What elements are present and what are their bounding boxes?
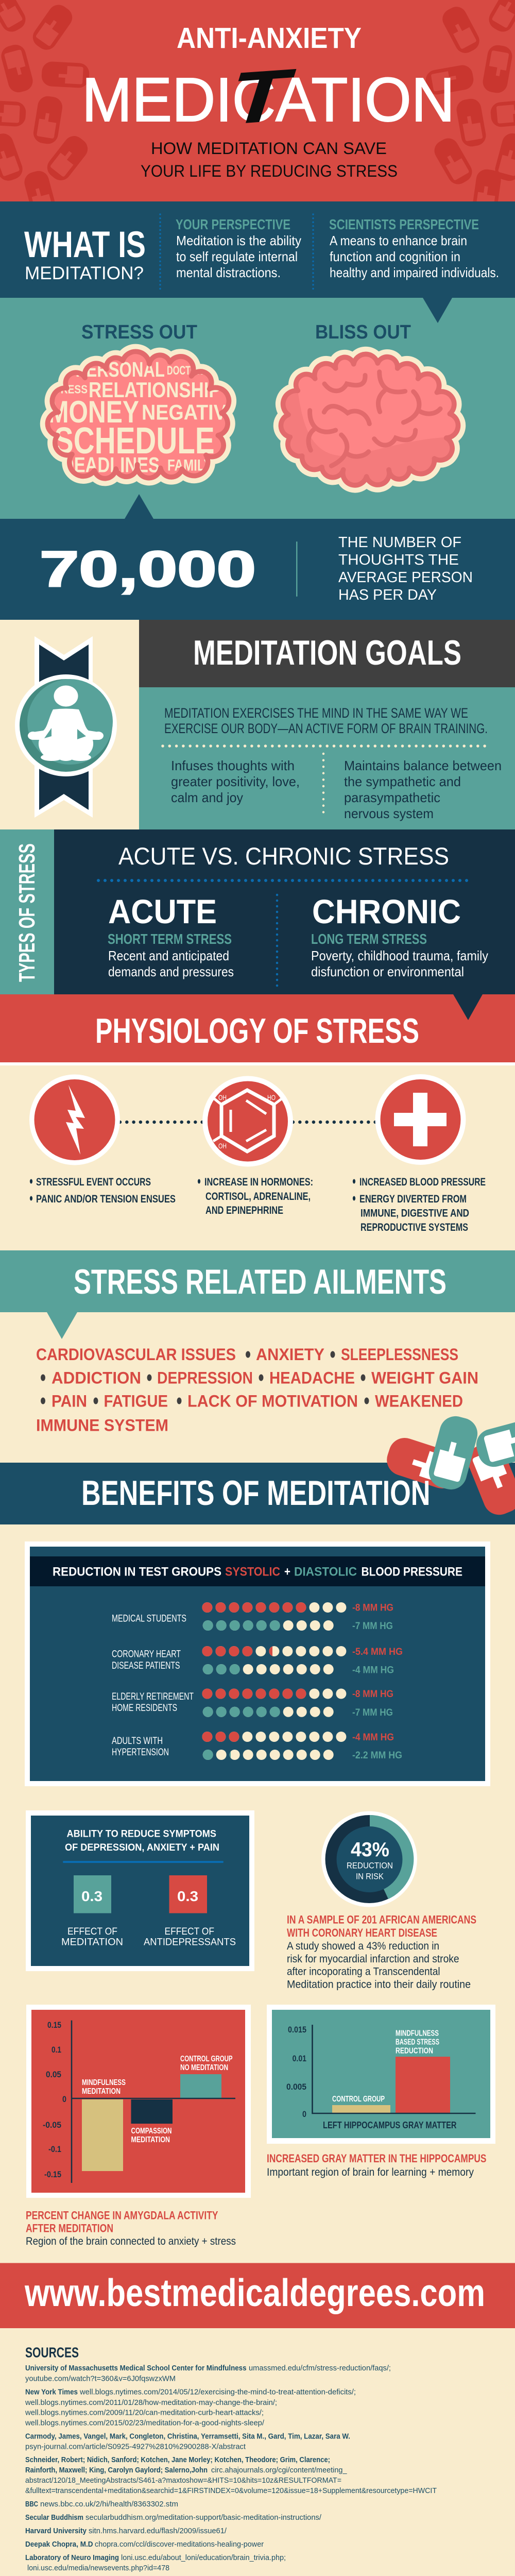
icon: stressed brain word cloud: FAMILY — [167, 455, 212, 474]
source: schneider: abstract/120/18_MeetingAbstracts/S461-a?maxtoshow=&HITS=10&hits=10z&RESULTFORMAT= — [25, 2477, 341, 2485]
panel: benefits of meditation header — [0, 1413, 515, 1524]
call to action: website banner — [0, 2263, 515, 2328]
source: chopra: Deepak Chopra, M.D — [25, 2540, 93, 2549]
donut chart: 43 percent reduction: IN RISK — [356, 1871, 384, 1882]
list: blood pressure: REPRODUCTIVE SYSTEMS — [360, 1221, 468, 1233]
list: ailments: IMMUNE SYSTEM — [36, 1416, 168, 1434]
source: neuro imaging: Laboratory of Neuro Imaging — [25, 2554, 119, 2562]
y axis labels: -0.15 — [44, 2170, 61, 2179]
heading: acute vs chronic: ACUTE VS. CHRONIC STRESS — [118, 842, 449, 870]
box: meditation effect: MEDITATION — [61, 1936, 123, 1947]
source: bbc: BBC — [25, 2500, 38, 2509]
panel title: ABILITY TO REDUCE SYMPTOMS — [67, 1828, 216, 1839]
box: antidepressant effect: 0.3 — [177, 1888, 198, 1904]
icon: ribbon with meditating figure — [15, 636, 117, 818]
list: ailments: WEAKENED — [375, 1392, 463, 1411]
chronic column: disfunction or environmental — [311, 964, 464, 979]
goal: nervous system balance: nervous system — [344, 806, 434, 821]
source: carmody — [25, 2433, 350, 2451]
y axis labels: 0 — [62, 2094, 66, 2104]
y axis labels: 0.015 — [288, 2025, 306, 2035]
chart title: DIASTOLIC — [294, 1565, 357, 1579]
subtitle — [141, 139, 398, 180]
bar labels: MEDITATION — [131, 2136, 170, 2144]
arrow: pointer up — [125, 494, 153, 519]
row: elderly retirement home residents: HOME RESIDENTS — [112, 1702, 177, 1714]
donut chart: 43 percent reduction — [321, 1811, 417, 1907]
source: umass — [25, 2364, 391, 2383]
icon: stressed brain word cloud: DEADLINES — [62, 453, 160, 477]
your perspective: mental distractions. — [176, 265, 281, 280]
heading: stress out: STRESS OUT — [81, 321, 197, 343]
text block: african american study: Meditation practice into their daily routine — [287, 1979, 471, 1991]
text block: amygdala: AFTER MEDITATION — [26, 2222, 113, 2235]
y axis labels: 0.15 — [47, 2020, 61, 2030]
row: coronary heart disease patients — [112, 1647, 403, 1675]
list: ailments: CARDIOVASCULAR ISSUES — [36, 1345, 236, 1364]
icon: colourful pills — [387, 1416, 515, 1515]
subtitle: HOW MEDITATION CAN SAVE — [151, 139, 387, 158]
panel: stress related ailments header — [0, 1250, 515, 1339]
list: ailments: LACK OF MOTIVATION — [187, 1392, 358, 1411]
donut chart: 43 percent reduction: 43% — [351, 1839, 389, 1861]
source: umass: youtube.com/watch?t=360&v=6J0fqswzxWM — [25, 2375, 176, 2383]
source: schneider: Rainforth, Maxwell; King, Carolyn Gaylord; Salerno,John — [25, 2466, 208, 2475]
y axis labels — [43, 2020, 66, 2179]
row: medical students: MEDICAL STUDENTS — [112, 1613, 186, 1624]
acute column: Recent and anticipated — [108, 948, 229, 963]
chart title: REDUCTION IN TEST GROUPS — [53, 1565, 221, 1579]
y axis labels: 0.005 — [286, 2082, 306, 2092]
source: neuro imaging — [25, 2554, 286, 2572]
panel title: OF DEPRESSION, ANXIETY + PAIN — [65, 1842, 219, 1853]
row: coronary heart disease patients: -4 MM HG — [352, 1665, 394, 1675]
text block: african american study: WITH CORONARY HEART DISEASE — [287, 1926, 437, 1939]
your perspective: Meditation is the ability — [176, 233, 301, 248]
y axis labels: 0.05 — [46, 2070, 61, 2079]
background pill pattern — [0, 0, 515, 221]
row: elderly retirement home residents — [112, 1689, 393, 1718]
source: schneider — [25, 2456, 437, 2495]
list: ailments: ANXIETY — [256, 1345, 324, 1364]
your perspective: YOUR PERSPECTIVE — [176, 216, 290, 232]
heading: bliss out: BLISS OUT — [315, 321, 411, 343]
number caption: AVERAGE PERSON — [338, 569, 473, 586]
text block: gray matter — [267, 2152, 486, 2178]
icon: lightning bolt — [29, 1075, 120, 1165]
goal: positivity: Infuses thoughts with — [171, 758, 295, 773]
source: nyt: well.blogs.nytimes.com/2014/05/12/exercising-the-mind-to-treat-attention-deficits/; — [79, 2388, 356, 2397]
row: coronary heart disease patients: CORONARY HEART — [112, 1649, 181, 1660]
number caption — [338, 534, 473, 603]
bar labels: BASED STRESS — [396, 2038, 439, 2046]
number caption: HAS PER DAY — [338, 587, 437, 603]
row: elderly retirement home residents: -8 MM HG — [352, 1689, 393, 1700]
heading: sources: SOURCES — [25, 2344, 79, 2361]
text block: gray matter: Important region of brain for learning + memory — [267, 2166, 474, 2178]
source: umass: University of Massachusetts Medical School Center for Mindfulness — [25, 2364, 246, 2372]
panel: physiology steps — [29, 1074, 486, 1233]
y axis labels — [286, 2025, 306, 2119]
text block: amygdala: Region of the brain connected to anxiety + stress — [26, 2235, 236, 2247]
panel: stress out vs bliss out — [0, 298, 515, 519]
scientists perspective: SCIENTISTS PERSPECTIVE — [329, 216, 479, 232]
vertical label: types of stress: TYPES OF STRESS — [14, 843, 40, 982]
text block: amygdala — [26, 2209, 236, 2247]
source: chopra: chopra.com/ccl/discover-meditations-healing-power — [95, 2540, 264, 2549]
source: bbc: news.bbc.co.uk/2/hi/health/8363302.stm — [40, 2500, 178, 2509]
hand-drawn letter T: T — [228, 54, 298, 140]
row: adults with hypertension: HYPERTENSION — [112, 1747, 169, 1758]
source: carmody: psyn-journal.com/article/S0925-4927%2810%2900288-X/abstract — [25, 2443, 246, 2451]
bar labels: NO MEDITATION — [180, 2063, 228, 2072]
scientists perspective: function and cognition in — [330, 249, 460, 264]
panel: hippocampus bar chart — [267, 2005, 495, 2144]
text block: african american study: risk for myocardial infarction and stroke — [287, 1953, 459, 1965]
row: adults with hypertension: -4 MM HG — [352, 1732, 394, 1743]
scientists perspective — [329, 216, 499, 280]
box: antidepressant effect — [144, 1875, 236, 1947]
goal: positivity — [171, 758, 300, 805]
hero header panel — [0, 0, 515, 221]
source: carmody: Carmody, James, Vangel, Mark, Congleton, Christina, Yerramsetti, Sita M., Gard, Tim, Lazar, Sara W. — [25, 2433, 350, 2441]
chronic column — [311, 892, 488, 979]
box: meditation effect: 0.3 — [81, 1888, 102, 1904]
panel: meditation goals — [0, 620, 515, 829]
panel title — [65, 1828, 219, 1853]
icon: stressed brain word cloud: PERSONAL — [76, 358, 165, 381]
goal: nervous system balance: the sympathetic and — [344, 774, 461, 789]
row: coronary heart disease patients: DISEASE PATIENTS — [112, 1660, 180, 1671]
arrow: pointer down — [453, 994, 483, 1020]
panel: types of stress — [0, 829, 515, 994]
list: ailments: ADDICTION — [52, 1368, 141, 1387]
box: antidepressant effect: EFFECT OF — [165, 1926, 214, 1937]
text block: african american study — [287, 1913, 476, 1991]
title: anti-anxiety: ANTI-ANXIETY — [177, 22, 362, 55]
bars — [82, 2074, 221, 2171]
bar labels: MEDITATION — [82, 2087, 121, 2096]
source: harvard — [25, 2527, 227, 2535]
icon: stressed brain word cloud: DOCTOR — [167, 364, 203, 378]
text block: african american study: after incoporating a Transcendental — [287, 1966, 440, 1978]
goal: positivity: calm and joy — [171, 790, 243, 805]
source: secular buddhism: secularbuddhism.org/meditation-support/basic-meditation-instructions/ — [85, 2514, 322, 2522]
icon: hormone molecule: OH — [218, 1142, 227, 1150]
list: ailments: PAIN — [52, 1392, 87, 1411]
source: harvard: Harvard University — [25, 2527, 87, 2535]
row: coronary heart disease patients: -5.4 MM HG — [352, 1647, 403, 1657]
arrow: pointer down — [47, 1312, 77, 1339]
box: meditation effect — [61, 1875, 123, 1947]
box: meditation effect: EFFECT OF — [67, 1926, 117, 1937]
chronic column: CHRONIC — [312, 892, 461, 930]
list: stressful event: STRESSFUL EVENT OCCURS — [36, 1176, 151, 1188]
chart title: SYSTOLIC — [225, 1565, 280, 1579]
row: adults with hypertension: -2.2 MM HG — [352, 1750, 402, 1761]
chart title: BLOOD PRESSURE — [362, 1565, 462, 1579]
list: ailments: FATIGUE — [104, 1392, 168, 1411]
icon: stressed brain word cloud — [47, 351, 239, 479]
icon: stressed brain word cloud: STRESS — [48, 382, 88, 396]
source: nyt: well.blogs.nytimes.com/2015/02/23/meditation-for-a-good-nights-sleep/ — [25, 2419, 265, 2428]
list: blood pressure: ENERGY DIVERTED FROM — [359, 1193, 467, 1205]
y axis labels: -0.05 — [43, 2120, 61, 2130]
source: schneider: &fulltext=transcendental+meditation&searchid=1&FIRSTINDEX=0&volume=120&issue=18+Supplement&resourcetype=HWCIT — [25, 2487, 437, 2495]
scientists perspective: A means to enhance brain — [330, 233, 467, 248]
source: nyt — [25, 2388, 356, 2428]
heading: what is: WHAT IS — [24, 225, 146, 265]
chart title — [53, 1565, 462, 1579]
list: hormones: AND EPINEPHRINE — [205, 1204, 283, 1216]
source: harvard: sitn.hms.harvard.edu/flash/2009/issue61/ — [89, 2527, 227, 2535]
source: nyt: New York Times — [25, 2388, 78, 2397]
panel: physiology of stress header — [0, 994, 515, 1065]
chronic column: LONG TERM STRESS — [311, 931, 427, 947]
bars — [332, 2057, 450, 2113]
source: nyt: well.blogs.nytimes.com/2009/11/20/can-meditation-curb-heart-attacks/; — [25, 2409, 264, 2417]
chronic column: Poverty, childhood trauma, family — [311, 948, 488, 963]
list: hormones: INCREASE IN HORMONES: — [204, 1176, 313, 1188]
bar labels — [332, 2029, 439, 2104]
icon: medical cross — [375, 1074, 466, 1165]
icon: hormone molecule — [202, 1076, 293, 1166]
list: ailments: DEPRESSION — [157, 1368, 253, 1387]
list: blood pressure: IMMUNE, DIGESTIVE AND — [360, 1207, 469, 1219]
icon: hormone molecule: OH — [218, 1093, 227, 1101]
list: ailments — [36, 1345, 478, 1434]
row: adults with hypertension — [112, 1732, 402, 1761]
list: stressful event: PANIC AND/OR TENSION ENSUES — [36, 1193, 176, 1205]
panel: amygdala bar chart — [26, 2005, 251, 2198]
row: elderly retirement home residents: -7 MM HG — [352, 1707, 393, 1718]
bar labels: MINDFULNESS — [82, 2078, 126, 2087]
goal: nervous system balance: Maintains balance between — [344, 758, 502, 773]
bar labels: REDUCTION — [396, 2046, 433, 2056]
acute column: SHORT TERM STRESS — [108, 931, 232, 947]
your perspective: to self regulate internal — [176, 249, 298, 264]
row: adults with hypertension: ADULTS WITH — [112, 1735, 163, 1747]
y axis labels: 0 — [302, 2109, 306, 2119]
title: medication: MEDICATION — [82, 64, 455, 134]
goal: nervous system balance: parasympathetic — [344, 790, 440, 805]
y axis labels: 0.01 — [293, 2054, 306, 2063]
source: schneider: circ.ahajournals.org/cgi/content/meeting_ — [211, 2466, 347, 2475]
source: neuro imaging: loni.usc.edu/media/newsevents.php?id=478 — [27, 2564, 169, 2572]
donut chart: 43 percent reduction: REDUCTION — [347, 1861, 393, 1870]
text block: amygdala: PERCENT CHANGE IN AMYGDALA ACTIVITY — [26, 2209, 218, 2222]
icon: stressed brain word cloud: NEGATIVE — [142, 400, 239, 424]
list: hormones: CORTISOL, ADRENALINE, — [205, 1190, 311, 1202]
source: neuro imaging: loni.usc.edu/about_loni/education/brain_trivia.php; — [121, 2554, 286, 2562]
goal: nervous system balance — [344, 758, 502, 821]
bar labels: MINDFULNESS — [396, 2029, 439, 2038]
source: schneider: Schneider, Robert; Nidich, Sanford; Kotchen, Jane Morley; Kotchen, Theodore; Grim, Clarence; — [25, 2456, 330, 2464]
icon: stressed brain word cloud: RELATIONSHIP — [89, 378, 221, 402]
sources — [25, 2344, 437, 2576]
bar labels: CONTROL GROUP — [180, 2055, 233, 2063]
icon: calm brain — [269, 354, 465, 486]
y axis labels: -0.1 — [48, 2144, 61, 2154]
number caption: THE NUMBER OF — [338, 534, 461, 551]
goals intro text — [164, 705, 488, 736]
icon: hormone molecule: HO — [267, 1093, 276, 1101]
source: nyt: well.blogs.nytimes.com/2011/01/28/how-meditation-may-change-the-brain/; — [25, 2399, 277, 2407]
list: ailments: SLEEPLESSNESS — [341, 1345, 458, 1364]
acute column: ACUTE — [108, 892, 217, 930]
list: ailments: WEIGHT GAIN — [371, 1368, 478, 1387]
panel: blood pressure chart — [25, 1541, 490, 1786]
text block: african american study: A study showed a 43% reduction in — [287, 1940, 439, 1952]
list: hormones — [198, 1176, 313, 1216]
bar labels: CONTROL GROUP — [332, 2095, 385, 2104]
panel: effect of meditation vs antidepressants — [26, 1810, 254, 1971]
source: secular buddhism: Secular Buddhism — [25, 2514, 83, 2522]
chart title: + — [284, 1565, 290, 1579]
row: medical students — [112, 1602, 393, 1632]
subtitle: YOUR LIFE BY REDUCING STRESS — [141, 162, 398, 180]
goal: positivity: greater positivity, love, — [171, 774, 300, 789]
icon: stressed brain word cloud: SCHEDULE — [54, 420, 215, 462]
bar labels — [82, 2055, 233, 2144]
big number: 70,000 — [40, 540, 256, 597]
icon: stressed brain word cloud: MONEY — [48, 394, 139, 429]
bar labels: COMPASSION — [131, 2127, 172, 2136]
acute column — [108, 892, 234, 979]
row: elderly retirement home residents: ELDERLY RETIREMENT — [112, 1691, 194, 1702]
y axis labels: 0.1 — [52, 2045, 61, 2055]
list: blood pressure — [353, 1176, 486, 1233]
heading: meditation: MEDITATION? — [25, 263, 144, 283]
x axis title: LEFT HIPPOCAMPUS GRAY MATTER — [323, 2120, 456, 2130]
list: ailments: HEADACHE — [269, 1368, 355, 1387]
row: medical students: -7 MM HG — [352, 1621, 393, 1632]
panel: what is meditation — [0, 201, 515, 298]
list: stressful event — [30, 1176, 176, 1205]
box: antidepressant effect: ANTIDEPRESSANTS — [144, 1936, 236, 1947]
row: medical students: -8 MM HG — [352, 1602, 393, 1614]
source: umass: umassmed.edu/cfm/stress-reduction/faqs/; — [249, 2364, 391, 2372]
arrow: pointer down — [423, 298, 452, 323]
panel: 70,000 thoughts — [0, 519, 515, 620]
number caption: THOUGHTS THE — [338, 552, 459, 568]
your perspective — [176, 216, 301, 280]
acute column: demands and pressures — [108, 964, 234, 979]
